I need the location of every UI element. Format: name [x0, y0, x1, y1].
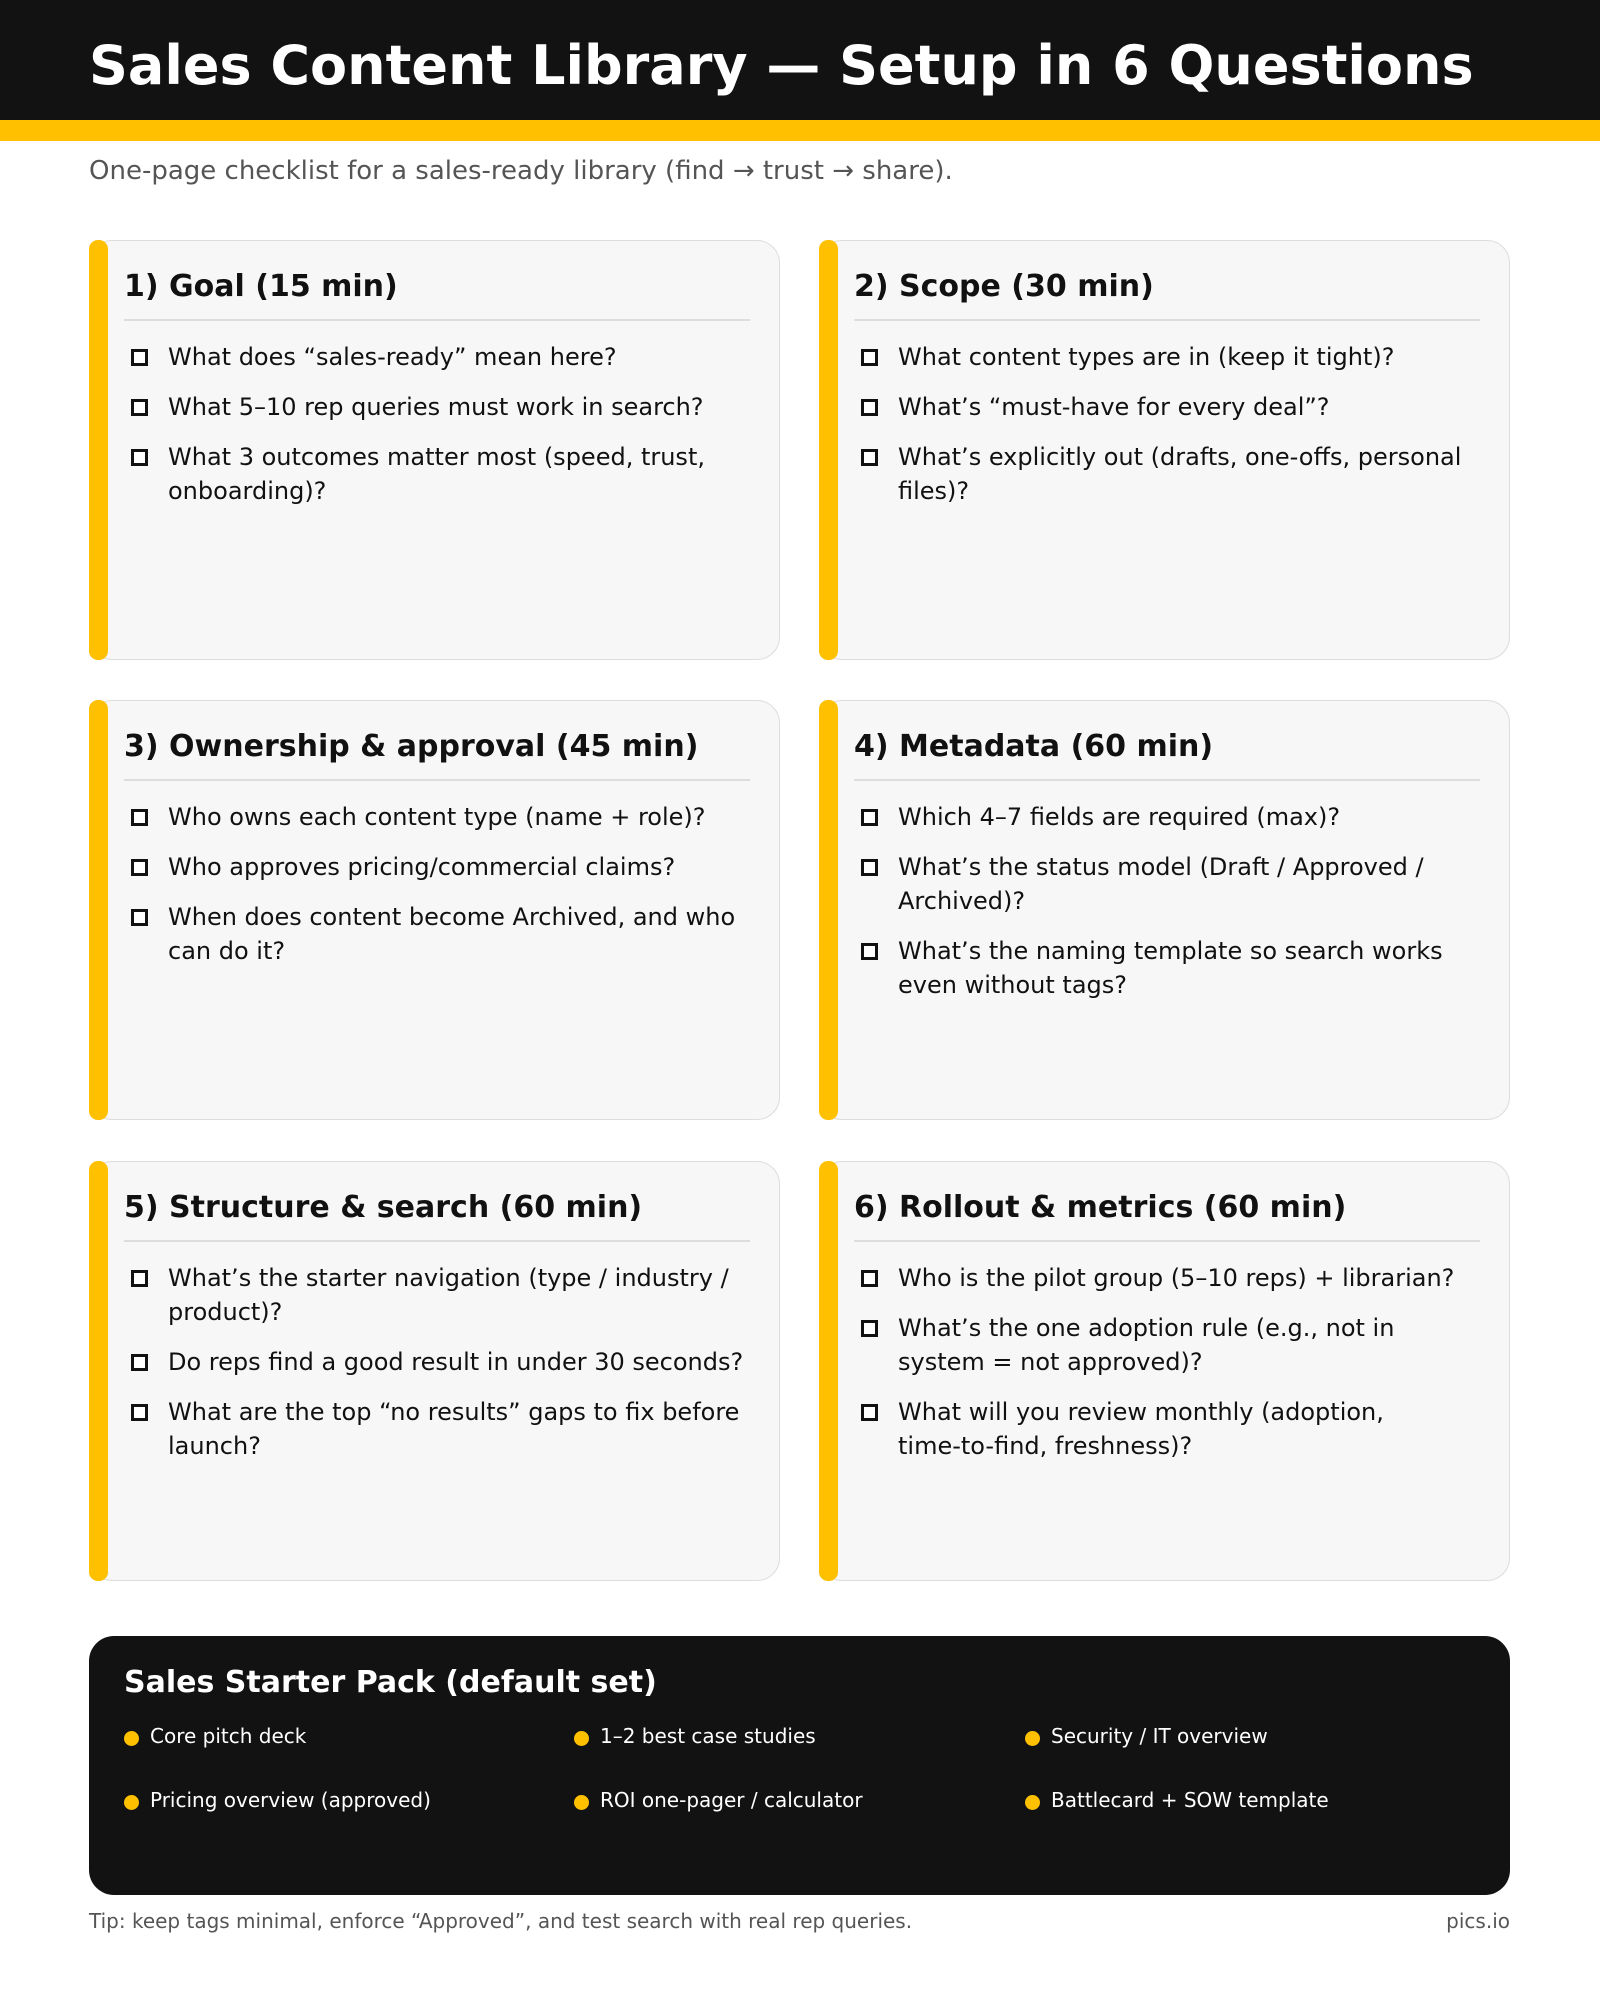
checklist: goal: What 3 outcomes matter most (speed, trust, onboarding)? — [168, 443, 705, 505]
panel: scope — [819, 240, 1510, 660]
bullet items: Security / IT overview — [1051, 1724, 1268, 1748]
heading: scope: 2) Scope (30 min) — [854, 269, 1154, 304]
footer brand: pics.io — [1446, 1909, 1510, 1933]
panel: starter pack — [89, 1636, 1510, 1895]
header bar — [0, 0, 1600, 120]
checklist: ownership: When does content become Archived, and who can do it? — [168, 903, 735, 965]
checklist: metadata: What’s the naming template so search works even without tags? — [898, 937, 1443, 999]
bullet items: ROI one-pager / calculator — [600, 1788, 863, 1812]
heading: starter pack: Sales Starter Pack (default set) — [124, 1665, 657, 1700]
heading: metadata: 4) Metadata (60 min) — [854, 729, 1213, 764]
checklist: scope: What’s explicitly out (drafts, one-offs, personal files)? — [898, 443, 1461, 505]
checklist: structure: What’s the starter navigation (type / industry / product)? — [168, 1264, 729, 1326]
checklist: rollout: What will you review monthly (adoption, time-to-find, freshness)? — [898, 1398, 1384, 1460]
subtitle: One-page checklist for a sales-ready library (find → trust → share). — [89, 156, 953, 186]
footer tip: Tip: keep tags minimal, enforce “Approved”, and test search with real rep queries. — [89, 1909, 912, 1933]
panel: structure — [89, 1161, 780, 1581]
heading: rollout: 6) Rollout & metrics (60 min) — [854, 1190, 1346, 1225]
checklist: ownership: Who owns each content type (name + role)? — [168, 803, 706, 831]
panel: metadata — [819, 700, 1510, 1120]
panel: ownership — [89, 700, 780, 1120]
checklist: goal — [131, 343, 705, 505]
checklist: scope: What’s “must-have for every deal”? — [898, 393, 1330, 421]
bullet items: Pricing overview (approved) — [150, 1788, 431, 1812]
bullet items: Battlecard + SOW template — [1051, 1788, 1329, 1812]
checklist: scope: What content types are in (keep it tight)? — [898, 343, 1394, 371]
checklist: metadata: What’s the status model (Draft / Approved / Archived)? — [898, 853, 1424, 915]
checklist: ownership — [131, 803, 735, 965]
checklist: metadata — [861, 803, 1443, 999]
checklist: goal: What does “sales-ready” mean here? — [168, 343, 617, 371]
title: Sales Content Library — Setup in 6 Questions — [89, 34, 1474, 97]
panel: goal — [89, 240, 780, 660]
checklist: ownership: Who approves pricing/commercial claims? — [168, 853, 675, 881]
checklist: structure: Do reps find a good result in under 30 seconds? — [168, 1348, 743, 1376]
heading: goal: 1) Goal (15 min) — [124, 269, 398, 304]
checklist: goal: What 5–10 rep queries must work in search? — [168, 393, 704, 421]
bullet items — [124, 1724, 1329, 1812]
checklist: rollout: What’s the one adoption rule (e.g., not in system = not approved)? — [898, 1314, 1394, 1376]
bullet items: Core pitch deck — [150, 1724, 306, 1748]
checklist: structure — [131, 1264, 743, 1460]
heading: structure: 5) Structure & search (60 min) — [124, 1190, 642, 1225]
checklist: structure: What are the top “no results” gaps to fix before launch? — [168, 1398, 739, 1460]
heading: ownership: 3) Ownership & approval (45 min) — [124, 729, 698, 764]
checklist: rollout: Who is the pilot group (5–10 reps) + librarian? — [898, 1264, 1454, 1292]
checklist: rollout — [861, 1264, 1454, 1460]
checklist: metadata: Which 4–7 fields are required (max)? — [898, 803, 1340, 831]
panel: rollout — [819, 1161, 1510, 1581]
bullet items: 1–2 best case studies — [600, 1724, 816, 1748]
checklist: scope — [861, 343, 1461, 505]
